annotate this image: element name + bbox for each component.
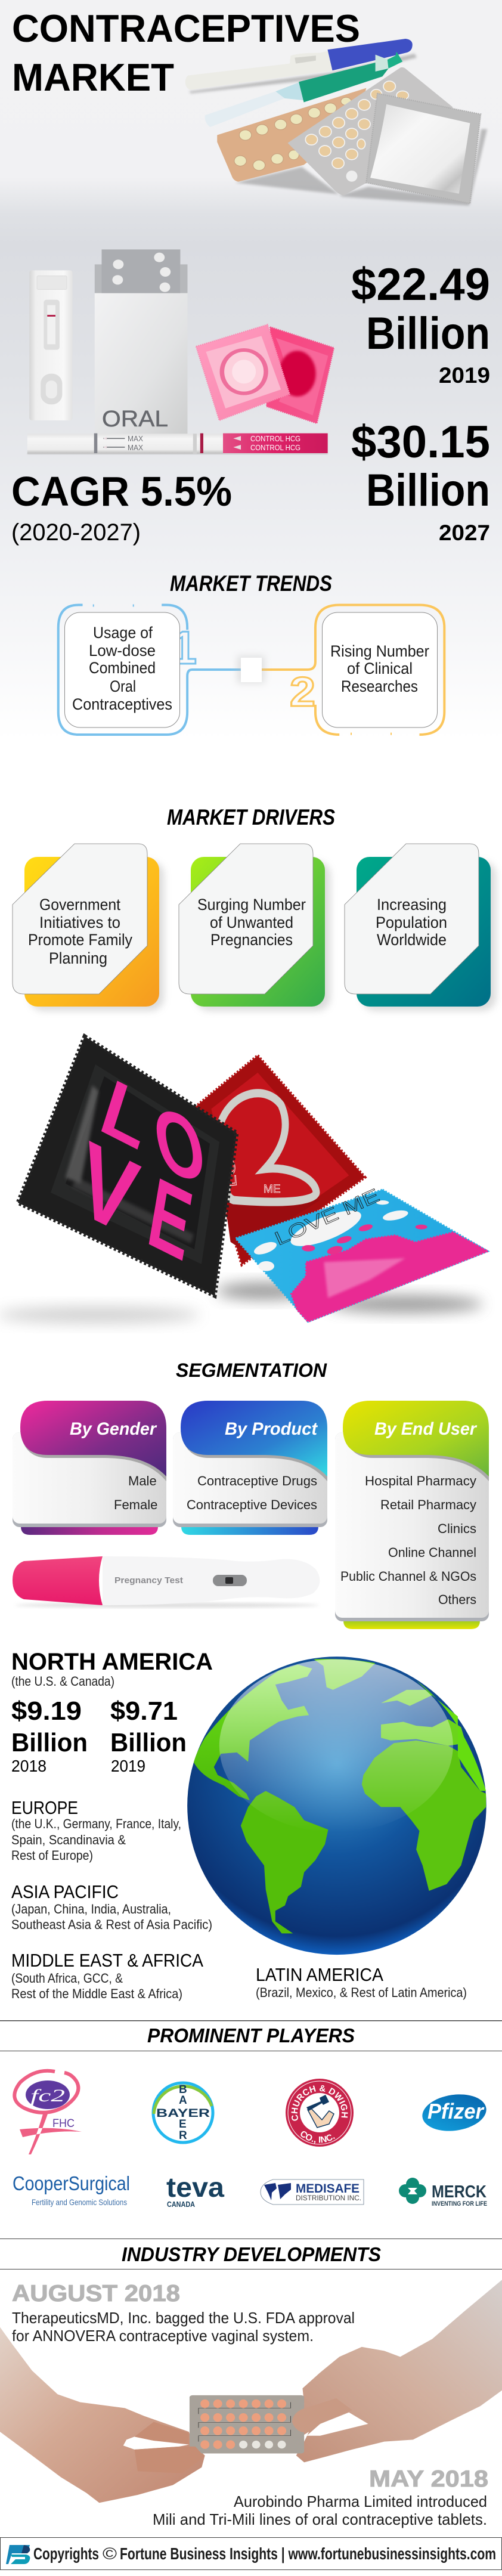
black packet LOVE lettering: E — [141, 1156, 199, 1283]
region: middle east and africa — [11, 1950, 203, 2001]
logo: Bayer: B — [179, 2083, 187, 2096]
panel: by gender: Female — [114, 1497, 157, 1512]
red packet text — [220, 1130, 280, 1196]
logo: Merck: INVENTING FOR LIFE — [432, 2200, 487, 2207]
trend card 1: Low-dose — [89, 642, 156, 660]
development: august 2018 — [12, 2281, 355, 2345]
red packet text: LOVE — [220, 1130, 240, 1188]
panel: market driver 1: Government — [39, 896, 120, 914]
panel: market driver 3: Population — [376, 914, 447, 931]
panel: market driver 3 — [345, 844, 496, 1011]
development: may 2018: MAY 2018 — [369, 2466, 488, 2492]
panel: by product: Contraceptive Drugs — [197, 1473, 317, 1488]
trend card 2: Rising Number — [330, 642, 429, 660]
region: europe — [11, 1797, 181, 1863]
panel: market driver 1: Initiatives to — [39, 914, 120, 931]
trend 2 outline — [262, 605, 444, 735]
trend card 2 — [322, 612, 438, 727]
north america value 2019 — [110, 1696, 187, 1775]
black packet LOVE lettering: V — [69, 1119, 147, 1258]
left hand — [0, 2327, 205, 2503]
north america value 2019: Billion — [110, 1728, 187, 1757]
product shadows — [189, 54, 487, 206]
region: middle east and africa: MIDDLE EAST & AFRICA — [11, 1950, 203, 1971]
logo: Church and Dwight — [286, 2079, 354, 2147]
trend card 1: Oral — [110, 677, 136, 695]
logo: Pfizer — [420, 2091, 489, 2135]
logo: Medisafe — [261, 2179, 364, 2205]
footer logo — [6, 2545, 30, 2564]
trend card 2: Researches — [341, 677, 418, 695]
panel: by end user: Clinics — [438, 1521, 476, 1536]
stat: market size 2019 — [351, 259, 490, 388]
text: ORAL: ORAL — [102, 407, 168, 432]
panel: by end user: Hospital Pharmacy — [365, 1473, 476, 1488]
logo: teva: teva — [166, 2172, 224, 2203]
stat: market size 2027: 2027 — [439, 521, 490, 545]
test cassette — [29, 270, 73, 420]
syringe — [205, 52, 402, 127]
development: august 2018: TherapeuticsMD, Inc. bagged the U.S. FDA approval — [12, 2309, 355, 2327]
illustration: test cassette, oral pill box, condoms, test strip — [27, 249, 334, 454]
development: august 2018: AUGUST 2018 — [12, 2281, 180, 2306]
region: north america: NORTH AMERICA — [11, 1649, 213, 1675]
region: asia pacific: (Japan, China, India, Australia, — [11, 1902, 171, 1916]
panel: by end user: Online Channel — [388, 1545, 476, 1560]
panel: market driver 3: Worldwide — [377, 931, 447, 949]
stat: market size 2019: 2019 — [439, 363, 490, 388]
pill strip — [190, 2395, 304, 2454]
north america value 2019: $9.71 — [110, 1696, 178, 1726]
region: middle east and africa: Rest of the Middle East & Africa) — [11, 1986, 182, 2001]
panel: by gender — [13, 1401, 166, 1535]
test strip — [27, 434, 328, 454]
text: test strip labels: MAX — [128, 443, 143, 452]
north america and upper rim — [194, 1665, 312, 1800]
panel: by gender: By Gender — [70, 1419, 157, 1439]
right hand — [293, 2280, 502, 2462]
trend card 1: Contraceptives — [72, 695, 172, 713]
stat: market size 2019: Billion — [366, 308, 490, 359]
region: europe: Spain, Scandinavia & — [11, 1832, 126, 1847]
pink condom back — [267, 327, 334, 423]
trend card 2: of Clinical — [347, 660, 413, 677]
heading: prominent players: PROMINENT PLAYERS — [147, 2024, 355, 2046]
footer text: Copyrights — [33, 2544, 99, 2563]
north america value 2018: $9.19 — [11, 1696, 82, 1726]
right thumb — [292, 2398, 352, 2433]
north america value 2018: 2018 — [11, 1757, 47, 1775]
panel: by product: Contraceptive Devices — [187, 1497, 317, 1512]
silver blister pack — [288, 67, 453, 196]
blue packet text: LOVE ME — [271, 1184, 383, 1249]
text: test strip labels: CONTROL HCG — [250, 434, 300, 443]
logo: CooperSurgical: Fertility and Genomic Solutions — [32, 2197, 127, 2207]
illustration: pregnancy test: Pregnancy Test — [114, 1575, 183, 1586]
logo: Bayer: E — [179, 2118, 187, 2131]
logo: Bayer — [153, 2083, 213, 2142]
greenland and top rim — [314, 1659, 375, 1690]
panel: market driver 2: Pregnancies — [210, 931, 293, 949]
region: asia pacific: Southeast Asia & Rest of Asia Pacific) — [11, 1917, 212, 1932]
gap between right fingers — [306, 2413, 368, 2436]
red packet — [196, 1055, 365, 1265]
logo: fc2 FHC — [14, 2071, 82, 2154]
stat: market size 2027: Billion — [366, 465, 490, 516]
heading: market trends: MARKET TRENDS — [170, 571, 332, 596]
trend 1 outline — [58, 605, 241, 735]
panel: by end user: Public Channel & NGOs — [340, 1569, 476, 1584]
red packet text: ME — [264, 1183, 280, 1196]
trend card 1 — [64, 612, 180, 727]
globe — [187, 1657, 486, 1955]
region: europe: Rest of Europe) — [11, 1848, 93, 1863]
development: may 2018: Mili and Tri-Mili lines of oral contraceptive tablets. — [153, 2510, 487, 2528]
panel: market driver 1: Planning — [49, 949, 107, 967]
logo: Pfizer: Pfizer — [427, 2099, 485, 2123]
photo: hands holding a pill strip — [0, 2280, 502, 2503]
panel: market driver 1 — [13, 844, 164, 1011]
trend card 1: Usage of — [93, 624, 153, 642]
illustration: pregnancy test — [13, 1556, 320, 1608]
north america value 2019: 2019 — [111, 1757, 145, 1775]
stat: market size 2019: $22.49 — [351, 259, 490, 310]
black packet LOVE lettering — [69, 1063, 214, 1283]
logo: CooperSurgical — [13, 2172, 130, 2207]
panel: by end user: Retail Pharmacy — [380, 1497, 476, 1512]
gap between left fingers — [123, 2436, 189, 2450]
logo: fc2 FHC: fc2 — [30, 2086, 65, 2106]
silver foil condom — [366, 94, 481, 203]
region: europe: (the U.K., Germany, France, Italy, — [11, 1816, 181, 1831]
trend connector — [241, 658, 262, 682]
page background gradient — [0, 0, 502, 739]
europe — [381, 1690, 466, 1746]
black packet — [18, 1036, 237, 1296]
panel: by end user: By End User — [374, 1419, 478, 1439]
stat: market size 2027 — [351, 417, 490, 545]
panel: market driver 3: Increasing — [377, 896, 447, 914]
region: middle east and africa: (South Africa, GCC, & — [11, 1971, 123, 1986]
logo: Merck — [399, 2178, 487, 2207]
panel: market trends — [58, 605, 444, 735]
africa — [362, 1741, 486, 1891]
logo: Church and Dwight: CHURCH & DWIGHT — [291, 2085, 348, 2121]
stat: market size 2027: $30.15 — [351, 417, 490, 467]
region: latin america: LATIN AMERICA — [256, 1964, 383, 1985]
development: august 2018: for ANNOVERA contraceptive vaginal system. — [12, 2327, 314, 2345]
region: north america — [11, 1649, 213, 1775]
panel: by end user: Others — [438, 1592, 476, 1607]
title: MARKET — [12, 55, 174, 99]
black packet LOVE lettering: L — [92, 1063, 160, 1166]
number 2 outline: 2 — [290, 668, 315, 715]
blue packet — [235, 1190, 488, 1322]
heading: market drivers: MARKET DRIVERS — [167, 805, 335, 829]
title: CONTRACEPTIVES — [12, 7, 360, 50]
left fingertips — [135, 2422, 204, 2473]
logo: Bayer: BAYER — [156, 2107, 210, 2120]
north america value 2018 — [11, 1696, 88, 1775]
development: may 2018 — [153, 2466, 488, 2528]
peach pill card — [217, 88, 366, 182]
stat: CAGR: (2020-2027) — [11, 519, 141, 546]
pregnancy test stick — [185, 39, 413, 90]
logo: Church and Dwight: CO., INC. — [300, 2131, 335, 2144]
heading: segmentation: SEGMENTATION — [176, 1360, 327, 1381]
text: test strip labels — [128, 434, 300, 452]
panel: market driver 2: Surging Number — [197, 896, 306, 914]
logo: Bayer: A — [179, 2094, 187, 2107]
logo: teva: CANADA — [167, 2200, 195, 2209]
text: test strip labels: CONTROL HCG — [250, 443, 300, 452]
footer — [0, 2538, 502, 2570]
region: latin america — [256, 1964, 467, 2000]
asia rim — [416, 1680, 486, 1791]
trend card 1: Combined — [89, 659, 156, 677]
pill box — [95, 249, 187, 434]
south america — [241, 1791, 328, 1933]
stat: CAGR: CAGR 5.5% — [11, 468, 232, 515]
number 1 outline: 1 — [172, 621, 197, 674]
packet shadows — [0, 1283, 483, 1323]
development: may 2018: Aurobindo Pharma Limited introduced — [234, 2493, 487, 2510]
logo: CooperSurgical: CooperSurgical — [13, 2172, 130, 2194]
region: latin america: (Brazil, Mexico, & Rest of Latin America) — [256, 1985, 467, 2000]
black packet LOVE lettering: O — [145, 1088, 214, 1202]
panel: by product — [173, 1401, 327, 1535]
logo: Medisafe: MEDISAFE — [296, 2182, 360, 2196]
panel: by gender: Male — [128, 1473, 157, 1488]
title — [12, 7, 360, 99]
text: test strip labels: MAX — [128, 434, 143, 443]
north america value 2018: Billion — [11, 1728, 88, 1757]
pink condom front — [196, 324, 290, 420]
trend connector shadow — [237, 656, 265, 683]
illustration: condom packets — [0, 1036, 488, 1323]
region: asia pacific — [11, 1881, 212, 1932]
panel: market driver 2 — [179, 844, 330, 1011]
stat: CAGR — [11, 468, 232, 546]
panel: by product: By Product — [225, 1419, 318, 1439]
region: north america: (the U.S. & Canada) — [11, 1674, 114, 1689]
region: asia pacific: ASIA PACIFIC — [11, 1881, 119, 1902]
logo: Merck: MERCK — [432, 2182, 486, 2202]
panel: market driver 1: Promote Family — [28, 931, 132, 949]
footer text: © — [103, 2544, 117, 2563]
panel: by end user — [335, 1401, 489, 1629]
logo: fc2 FHC: FHC — [52, 2117, 75, 2130]
logo: Medisafe: DISTRIBUTION INC. — [296, 2194, 361, 2202]
photo: contraceptive products — [185, 39, 487, 206]
panel: market driver 2: of Unwanted — [210, 914, 293, 931]
region: europe: EUROPE — [11, 1797, 78, 1818]
heading: industry developments: INDUSTRY DEVELOPMENTS — [122, 2243, 381, 2265]
gloss highlight — [219, 1659, 453, 1832]
logo: Bayer: R — [179, 2129, 187, 2142]
